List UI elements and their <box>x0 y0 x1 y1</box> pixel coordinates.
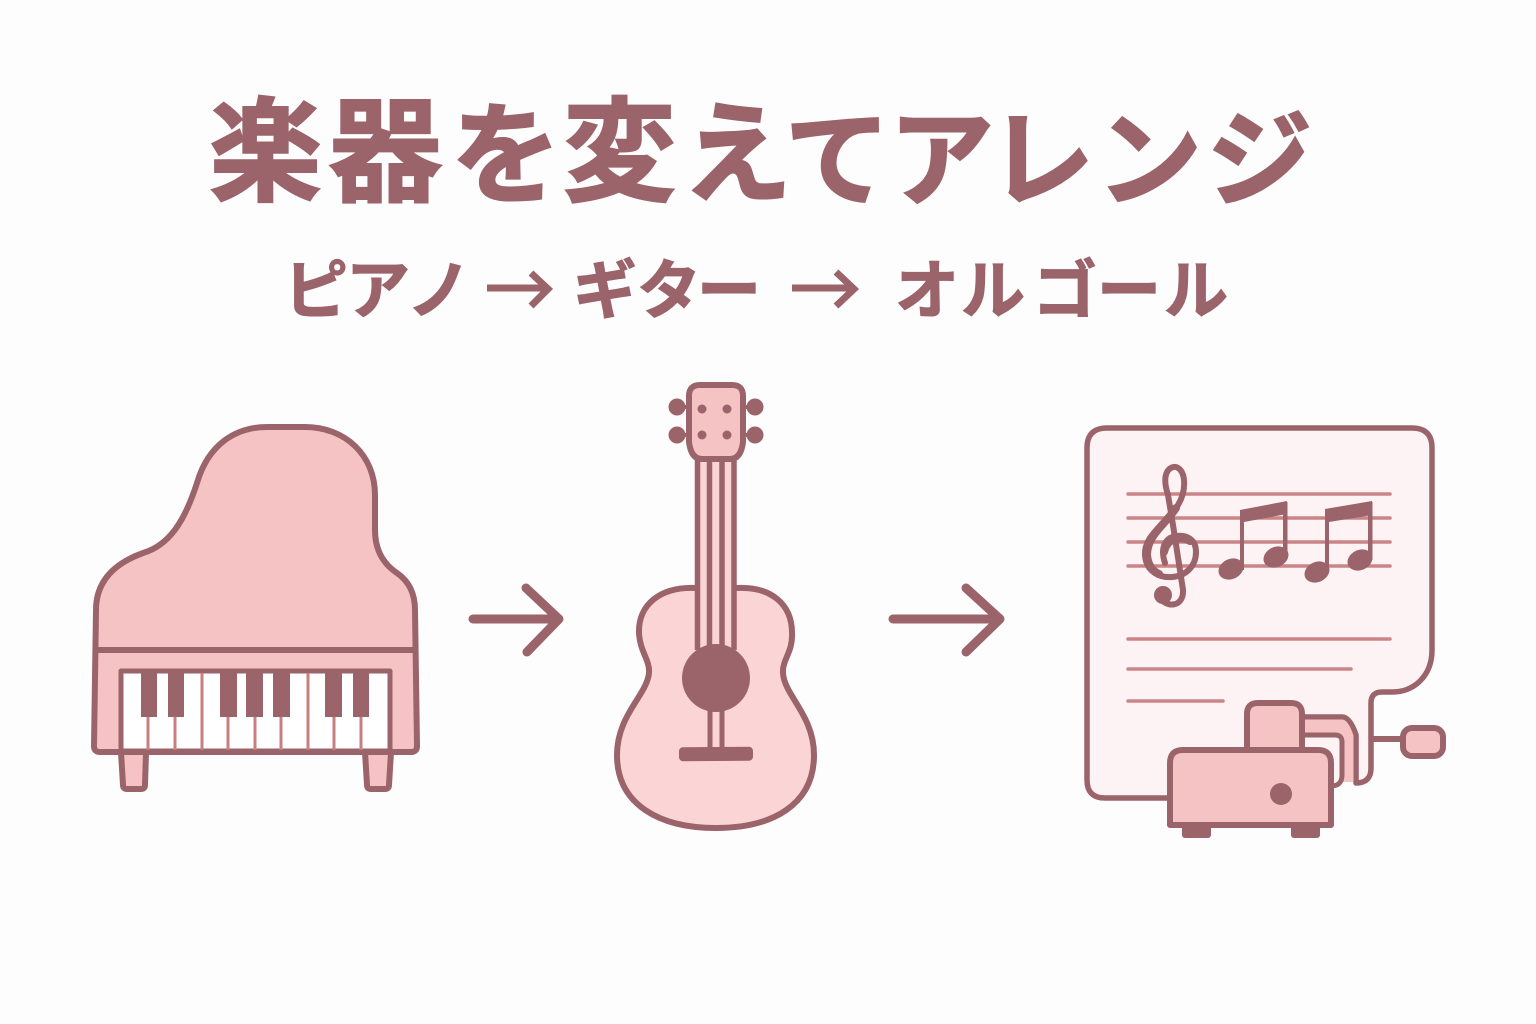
keyboard <box>121 671 390 751</box>
music box knob <box>1270 783 1292 805</box>
tuning pegs <box>668 398 764 444</box>
title: 変 <box>563 90 676 216</box>
icon: sheet music with music box <box>1087 428 1443 838</box>
sheet of paper fill <box>1087 428 1432 798</box>
subtitle arrow 1 <box>487 273 548 306</box>
icon: guitar <box>617 385 814 828</box>
guitar neck and strings <box>697 458 734 650</box>
subtitle: instrument sequence <box>284 255 1228 327</box>
guitar body <box>617 588 814 828</box>
title: を <box>451 95 561 218</box>
bridge stem <box>710 705 722 750</box>
subtitle word: guitar: ギター <box>573 255 761 327</box>
piano lid line <box>96 647 416 653</box>
music box feet <box>1182 825 1320 838</box>
staff lines <box>1128 494 1390 566</box>
sheet of paper outline <box>1087 428 1432 798</box>
crank handle <box>1403 728 1443 756</box>
treble clef <box>1145 467 1196 605</box>
arrow: guitar to music box <box>893 588 1000 652</box>
piano body <box>94 427 417 752</box>
subtitle arrow 2 <box>792 272 854 306</box>
music box body <box>1170 750 1331 825</box>
headstock <box>689 385 743 459</box>
subtitle word: music box: オルゴール <box>895 255 1228 327</box>
bridge <box>679 747 753 761</box>
text lines <box>1128 639 1390 701</box>
title: て <box>785 103 890 220</box>
title: アレンジ <box>889 103 1312 220</box>
headstock holes <box>698 404 732 440</box>
crank arm lines <box>1303 717 1356 786</box>
title: え <box>682 94 792 217</box>
title: 楽器 <box>209 90 442 216</box>
piano legs <box>121 752 391 789</box>
arrow: piano to guitar <box>473 588 559 652</box>
first beamed notes <box>1215 501 1292 584</box>
subtitle word: piano: ピアノ <box>284 255 471 327</box>
second beamed notes <box>1301 501 1376 587</box>
icon: grand piano <box>94 427 417 789</box>
black keys <box>141 673 369 717</box>
crank arm <box>1303 717 1356 782</box>
music box top <box>1247 703 1302 750</box>
white key separators <box>148 673 361 750</box>
crank shaft <box>1371 736 1403 742</box>
sound hole <box>682 644 750 712</box>
